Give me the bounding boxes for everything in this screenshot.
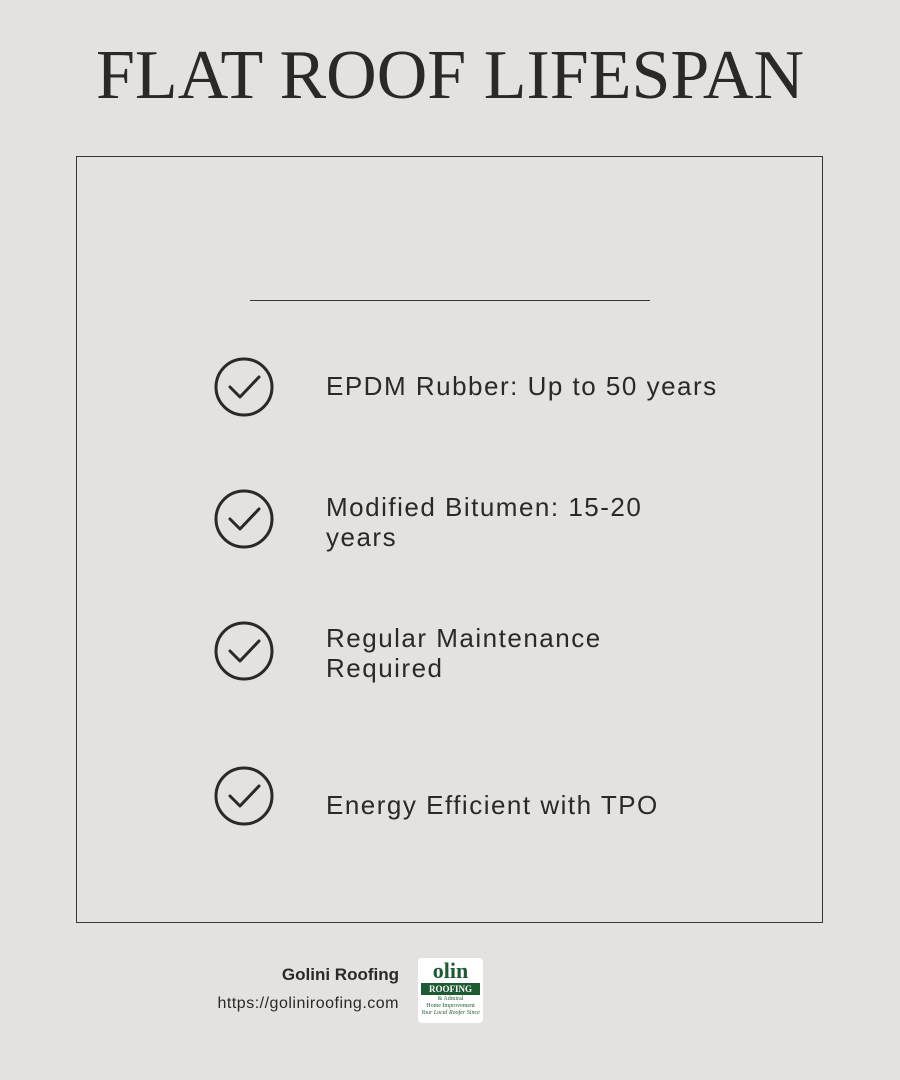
- logo: [418, 958, 483, 1023]
- divider line: [250, 300, 650, 301]
- logo: ROOFING: [429, 984, 472, 994]
- logo: Home Improvement: [426, 1003, 475, 1009]
- icon: check: [214, 622, 274, 680]
- item: Maintenance: Required: [326, 653, 444, 683]
- item: Maintenance: [214, 622, 602, 683]
- icon: check: [214, 358, 274, 416]
- item: Modified Bitumen: years: [326, 522, 397, 552]
- item: Modified Bitumen: Modified Bitumen: 15-20: [326, 492, 642, 522]
- logo: Your Local Roofer Since: [421, 1010, 480, 1016]
- logo: & Admiral: [438, 996, 463, 1002]
- logo: olin: [433, 958, 468, 983]
- item: TPO: [214, 766, 659, 826]
- icon: check: [214, 766, 274, 826]
- item: Maintenance: Regular Maintenance: [326, 623, 602, 653]
- item: EPDM: EPDM Rubber: Up to 50 years: [326, 371, 718, 401]
- item: EPDM: [214, 358, 718, 416]
- footer: url: https://goliniroofing.com: [218, 995, 399, 1012]
- title: FLAT ROOF LIFESPAN: [96, 37, 804, 114]
- footer: company name: Golini Roofing: [282, 965, 399, 984]
- item: TPO: Energy Efficient with TPO: [326, 790, 659, 820]
- icon: check: [214, 490, 274, 548]
- panel: list box: [76, 156, 823, 923]
- item: Modified Bitumen: [214, 490, 642, 552]
